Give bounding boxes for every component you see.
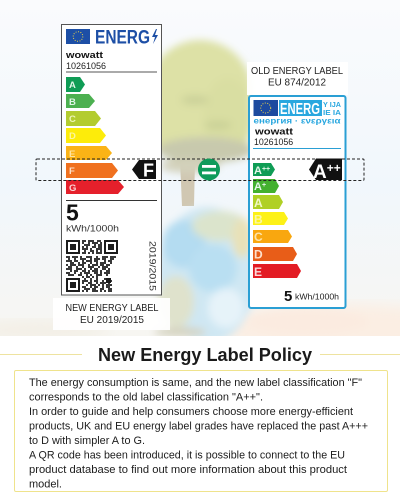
old label caption: OLD ENERGY LABEL xyxy=(251,65,343,77)
bar C: C xyxy=(254,230,263,244)
new label caption: NEW ENERGY LABEL xyxy=(66,302,159,314)
bar G: G xyxy=(69,183,76,194)
tree trunk xyxy=(180,160,195,206)
globe xyxy=(154,207,257,343)
consumption value: 5 xyxy=(66,200,79,226)
bar A+: + xyxy=(262,182,266,189)
old label caption: EU 874/2012 xyxy=(268,76,326,88)
policy text box xyxy=(14,370,388,492)
QR code xyxy=(66,240,117,291)
icon: EU flag xyxy=(66,29,90,44)
vertical regulation year: 2019/2015 xyxy=(146,241,158,291)
bar A++: ++ xyxy=(262,166,270,173)
bar B: B xyxy=(254,212,263,226)
energy scale A++ to E xyxy=(253,163,301,279)
consumption unit: kWh/1000h xyxy=(66,224,119,234)
energy scale A to G xyxy=(66,77,124,194)
bar C: C xyxy=(69,114,76,125)
bar D: D xyxy=(254,248,263,262)
new label class F pointer xyxy=(132,160,156,180)
icon: EU flag xyxy=(254,100,278,116)
new label class F pointer: F xyxy=(143,160,154,180)
section title: New Energy Label Policy xyxy=(98,344,313,365)
equals sign icon xyxy=(198,158,220,180)
policy text box: product database to find out more information about this product xyxy=(29,464,347,476)
new energy label card xyxy=(62,24,162,295)
policy text box: In order to guide and help consumers choose more energy-efficient xyxy=(29,406,353,418)
bar D: D xyxy=(69,131,76,142)
comparison dashed band xyxy=(36,159,364,180)
policy text box: corresponds to the old label classification "A++". xyxy=(29,392,263,404)
policy text box: The energy consumption is same, and the new label classification "F" xyxy=(29,377,362,389)
consumption value: 5 xyxy=(284,288,292,305)
tree foliage xyxy=(146,40,253,173)
policy text box: products, UK and EU energy label grades have replaced the past A+++ xyxy=(29,420,368,432)
model number: 10261056 xyxy=(66,61,106,71)
bar A+ xyxy=(253,179,279,193)
energy heading: Y IJA xyxy=(323,102,341,109)
background photo: tree and globe xyxy=(0,0,400,352)
policy text box: A QR code has been introduced, it is possible to connect to the EU xyxy=(29,450,345,462)
model number: 10261056 xyxy=(254,137,293,147)
multilingual energy word: енергия · ενεργεια xyxy=(254,116,341,126)
energy heading: IE IA xyxy=(323,110,341,117)
policy text box: model. xyxy=(29,478,62,490)
old label class A++ pointer xyxy=(309,158,342,183)
bar B: B xyxy=(69,97,76,108)
bottom white panel xyxy=(0,336,400,494)
brand name: wowatt xyxy=(254,126,294,138)
brand name: wowatt xyxy=(65,50,104,61)
energy heading: ENERG xyxy=(280,101,320,118)
old label class A++ pointer: ++ xyxy=(327,161,341,175)
bar A+: A xyxy=(254,181,262,193)
old energy label card xyxy=(249,96,346,308)
energy heading: ENERG xyxy=(95,28,150,48)
consumption unit: kWh/1000h xyxy=(295,292,339,302)
old label caption xyxy=(247,62,348,95)
policy text box: to D with simpler A to G. xyxy=(29,435,145,447)
bar A++ xyxy=(253,163,275,177)
bar E: E xyxy=(254,265,262,279)
bar F: F xyxy=(69,166,75,177)
icon: lightning bolt xyxy=(152,29,158,44)
old label class A++ pointer: A xyxy=(313,162,327,183)
bar A++: A xyxy=(254,165,262,177)
new label caption xyxy=(53,298,170,330)
bar A: A xyxy=(254,196,263,210)
bar A: A xyxy=(69,80,76,91)
new label caption: EU 2019/2015 xyxy=(80,314,144,326)
bar E: E xyxy=(69,149,75,160)
